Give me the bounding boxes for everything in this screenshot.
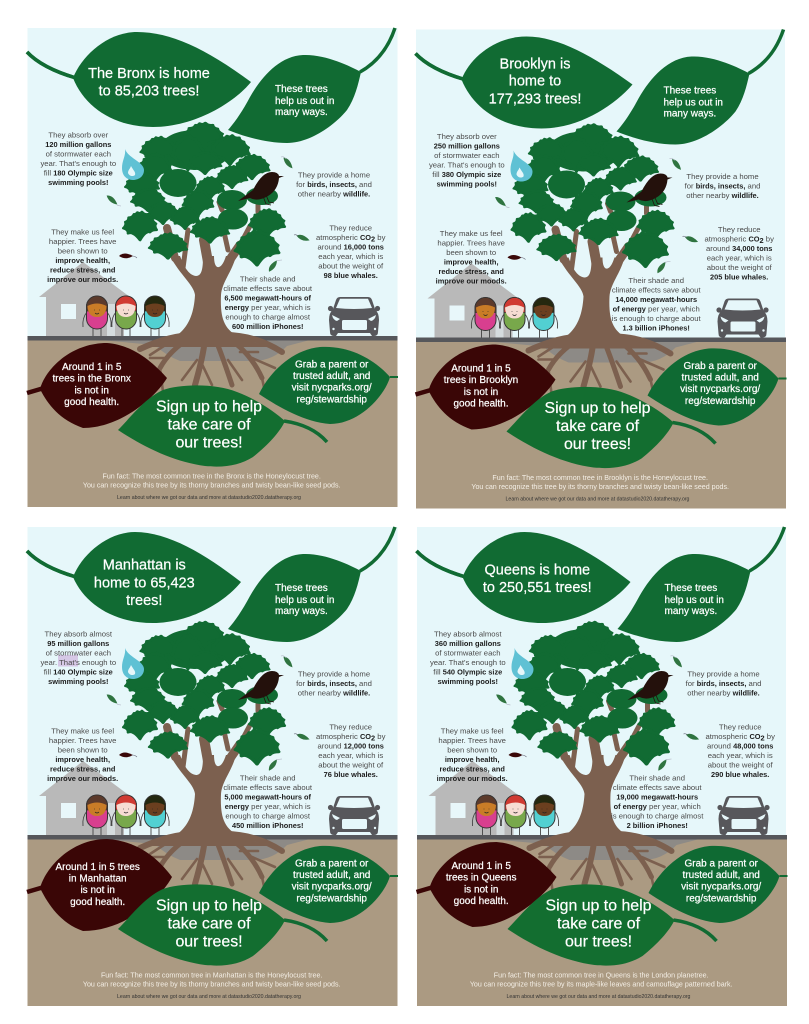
callout: grab a parent: reg/stewardship [296, 394, 367, 405]
text: stormwater: 360 million gallons [435, 639, 501, 648]
text: stormwater: of stormwater each [46, 648, 111, 658]
callout: health: is not in [80, 885, 115, 896]
text: wildlife [686, 669, 761, 698]
title: Manhattan is [103, 557, 186, 573]
text: happiness: happier. Trees have [438, 736, 506, 745]
text: stormwater: swimming pools! [437, 180, 497, 188]
text: stormwater: of stormwater each [46, 150, 111, 158]
illustration: house, tree, roots, children, car [28, 622, 398, 1006]
fun fact [83, 472, 341, 490]
callout: health: trees in Brooklyn [444, 375, 518, 386]
callout: health: good health. [453, 398, 509, 410]
callout: sign up: our trees! [564, 436, 631, 453]
text: energy: enough to charge almost [225, 812, 311, 821]
text: carbon dioxide: atmospheric CO [705, 732, 761, 741]
callout: grab a parent: visit nycparks.org/ [680, 384, 760, 395]
fun fact: Fun fact: The most common tree in Queens is the London planetree. [494, 971, 709, 979]
text: stormwater: They absorb almost [434, 629, 502, 638]
callout: sign up: take care of [556, 418, 640, 435]
text: carbon dioxide: by [765, 732, 775, 741]
text: wildlife: other nearby wildlife. [298, 190, 370, 199]
text: happiness: been shown to [58, 247, 108, 256]
callout: health: Around 1 in 5 [451, 364, 511, 374]
callout: grab a parent: Grab a parent or [295, 858, 369, 869]
fun fact [470, 971, 733, 989]
text: wildlife [296, 170, 372, 199]
callout: grab a parent: trusted adult, and [682, 372, 759, 384]
text: energy [223, 275, 313, 331]
text: stormwater: fill 380 Olympic size [432, 170, 501, 179]
callout: sign up [156, 898, 262, 950]
heading: these trees: help us out in [664, 98, 723, 108]
fun fact: You can recognize this tree by its thorny branches and twisty bean-like seed pods. [83, 482, 341, 490]
text: happiness: been shown to [446, 248, 496, 257]
illustration: house, tree, roots, children, car [416, 124, 786, 508]
fun fact: You can recognize this tree by its maple-like leaves and camouflage patterned bark. [470, 981, 733, 989]
text: energy: climate effects save about [223, 284, 313, 293]
fun fact: Fun fact: The most common tree in Manhattan is the Honeylocust tree. [101, 971, 322, 979]
text: carbon dioxide: by [764, 235, 774, 244]
text: stormwater: year. That's enough to [40, 159, 116, 168]
text: energy: climate effects save about [613, 783, 702, 792]
panel background [416, 30, 785, 508]
text: happiness: improve health, [444, 258, 499, 267]
text: happiness: happier. Trees have [49, 736, 116, 745]
panel: Queens [416, 527, 788, 1006]
text: energy [223, 774, 313, 830]
text: stormwater: fill 180 Olympic size [44, 168, 113, 178]
callout: health [446, 861, 517, 907]
source: Learn about where we got our data and more at datastudio2020.datatherapy.org [117, 495, 301, 501]
text: stormwater [40, 629, 116, 686]
panel: The Bronx [27, 28, 398, 507]
text: energy: 600 million iPhones! [232, 322, 303, 331]
callout: health: good health. [454, 896, 509, 907]
callout: health: good health. [70, 897, 125, 908]
callout: sign up: take care of [557, 916, 641, 932]
text: carbon dioxide: atmospheric CO [316, 233, 371, 242]
panel background [417, 527, 786, 1006]
text: stormwater: swimming pools! [438, 677, 498, 686]
text: stormwater: 120 million gallons [45, 140, 111, 149]
text: stormwater [40, 130, 116, 187]
callout: grab a parent [292, 359, 372, 405]
fun fact [83, 971, 341, 989]
text: energy: 450 million iPhones! [232, 821, 303, 830]
text: energy: is enough to charge about [612, 314, 702, 323]
text: carbon dioxide: atmospheric CO [704, 235, 760, 244]
callout: sign up: take care of [167, 416, 251, 434]
text: energy: Their shade and [628, 276, 684, 285]
text: carbon dioxide: each year, which is [707, 254, 772, 263]
text: happiness [47, 727, 118, 783]
illustration: house, tree, roots, children, car [28, 123, 398, 507]
heading: these trees: help us out in [664, 595, 724, 606]
text: happiness: reduce stress, and [439, 267, 504, 276]
callout: grab a parent: reg/stewardship [685, 396, 756, 407]
text: wildlife: They provide a home [298, 669, 370, 678]
illustration: house, tree, roots, children, car [417, 622, 787, 1006]
callout: grab a parent: Grab a parent or [685, 858, 759, 869]
heading: these trees: help us out in [275, 595, 334, 606]
callout: health: Around 1 in 5 [451, 861, 511, 872]
heading: these trees: These trees [275, 583, 328, 594]
text: happiness: They make us feel [51, 727, 114, 736]
highlight on word [58, 655, 78, 666]
text: happiness: improve our moods. [47, 275, 118, 284]
text: energy: climate effects save about [223, 783, 313, 792]
text: stormwater: of stormwater each [435, 648, 500, 658]
text: carbon dioxide: 205 blue whales. [710, 273, 768, 282]
title [88, 66, 210, 100]
callout: grab a parent: visit nycparks.org/ [292, 383, 372, 394]
text: energy: 19,000 megawatt-hours [616, 793, 698, 802]
callout: grab a parent: trusted adult, and [683, 870, 760, 881]
text: happiness: improve our moods. [47, 774, 118, 783]
leaf: helpers and call to action shapes [27, 28, 398, 467]
callout: sign up: our trees! [175, 933, 243, 950]
callout: health: Around 1 in 5 [62, 362, 122, 373]
text: wildlife: other nearby wildlife. [298, 689, 370, 698]
callout: health: in Manhattan [69, 874, 127, 885]
fun fact: Fun fact: The most common tree in the Bronx is the Honeylocust tree. [103, 472, 321, 480]
text: energy: enough to charge almost [225, 313, 311, 322]
text: carbon dioxide: each year, which is [318, 751, 383, 760]
leaf: helpers and call to action shapes [27, 527, 398, 966]
text: happiness: improve health, [55, 755, 110, 764]
text: happiness: reduce stress, and [440, 765, 505, 774]
text: happiness: reduce stress, and [50, 266, 116, 275]
text: carbon dioxide: They reduce [329, 224, 372, 233]
callout: grab a parent: visit nycparks.org/ [292, 882, 372, 893]
text: stormwater: 95 million gallons [47, 639, 109, 648]
text: carbon dioxide: They reduce [719, 723, 762, 732]
text: carbon dioxide: each year, which is [708, 751, 773, 760]
callout: grab a parent [680, 361, 760, 407]
heading: these trees [275, 84, 334, 118]
text: carbon dioxide: by [375, 732, 386, 741]
text: happiness: been shown to [447, 746, 497, 755]
text: carbon dioxide: around 12,000 tons [318, 742, 384, 751]
callout: grab a parent: Grab a parent or [684, 361, 758, 372]
text: energy [612, 276, 702, 333]
callout: health [444, 364, 518, 410]
text: carbon dioxide: 2 [760, 236, 764, 245]
text: wildlife: They provide a home [687, 669, 760, 678]
callout: grab a parent: visit nycparks.org/ [681, 882, 761, 893]
text: happiness: happier. Trees have [437, 239, 505, 248]
text: stormwater: They absorb over [48, 130, 109, 139]
text: happiness: They make us feel [441, 727, 504, 736]
text: energy: is enough to charge almost [611, 812, 704, 821]
text: energy: Their shade and [240, 275, 295, 284]
callout: sign up: Sign up to help [156, 399, 262, 416]
text: stormwater [430, 629, 506, 686]
text: energy: 2 billion iPhones! [627, 821, 688, 830]
text: carbon dioxide: each year, which is [318, 252, 383, 261]
text: carbon dioxide: 76 blue whales. [324, 770, 378, 779]
text: happiness [47, 228, 118, 284]
text: happiness: reduce stress, and [50, 765, 116, 774]
callout: sign up [545, 898, 652, 950]
text: wildlife: for birds, insects, and [686, 679, 761, 688]
text: stormwater: of stormwater each [434, 151, 499, 160]
callout: sign up [544, 400, 651, 453]
heading: these trees: These trees [664, 583, 717, 594]
text: wildlife: other nearby wildlife. [686, 191, 759, 200]
text: happiness: improve health, [55, 256, 110, 265]
callout: health: trees in Queens [446, 873, 517, 884]
callout: grab a parent: reg/stewardship [686, 893, 757, 904]
callout: grab a parent [292, 858, 372, 904]
callout: sign up: Sign up to help [544, 400, 651, 417]
text: carbon dioxide: by [375, 233, 386, 242]
text: stormwater: They absorb almost [45, 629, 113, 638]
text: carbon dioxide [705, 723, 775, 779]
heading: these trees: help us out in [275, 96, 334, 107]
text: carbon dioxide: about the weight of [708, 761, 774, 770]
text: happiness: improve health, [445, 755, 500, 764]
heading: these trees: These trees [275, 84, 328, 95]
callout: sign up [156, 399, 262, 451]
text: carbon dioxide: 2 [371, 734, 375, 743]
callout: health [55, 862, 140, 908]
title: Queens is home [485, 562, 590, 578]
callout: sign up: Sign up to help [545, 898, 652, 915]
heading: these trees [664, 86, 723, 120]
text: happiness [436, 229, 507, 286]
text: stormwater: year. That's enough to [40, 658, 116, 667]
panel background [28, 527, 398, 1006]
text: carbon dioxide: around 16,000 tons [318, 243, 384, 252]
panel background [28, 28, 398, 506]
callout: health [53, 362, 131, 408]
heading: these trees: many ways. [664, 108, 716, 120]
leaf: helpers and call to action shapes [416, 527, 788, 966]
title: 177,293 trees! [489, 91, 581, 107]
text: energy: Their shade and [240, 774, 295, 783]
title: home to 65,423 [94, 575, 195, 591]
text: energy: of energy per year, which [613, 305, 700, 314]
text: stormwater: They absorb over [437, 132, 497, 141]
text: carbon dioxide: 2 [371, 235, 375, 244]
text: wildlife: for birds, insects, and [296, 679, 372, 688]
text: happiness: been shown to [58, 746, 108, 755]
title: Brooklyn is [500, 56, 570, 72]
text: carbon dioxide: about the weight of [318, 262, 384, 271]
text: carbon dioxide: 98 blue whales. [324, 271, 378, 280]
callout: sign up: our trees! [175, 434, 243, 451]
text: happiness: improve our moods. [436, 277, 507, 286]
text: stormwater: swimming pools! [48, 178, 108, 187]
callout: sign up: take care of [167, 916, 251, 932]
callout: grab a parent: Grab a parent or [295, 359, 369, 370]
text: energy: 1.3 billion iPhones! [623, 324, 690, 333]
title [483, 562, 592, 596]
text: energy [611, 774, 704, 830]
leaf: helpers and call to action shapes [416, 30, 786, 468]
fun fact: You can recognize this tree by its thorny branches and twisty bean-like seed pods. [83, 981, 341, 989]
text: happiness [437, 727, 508, 783]
callout: health: trees in the Bronx [53, 374, 131, 385]
heading: these trees [664, 583, 724, 617]
text: energy: climate effects save about [612, 286, 701, 295]
text: wildlife: They provide a home [298, 170, 370, 179]
title: The Bronx is home [88, 66, 210, 82]
text: energy: 14,000 megawatt-hours [615, 295, 697, 304]
text: energy: of energy per year, which [614, 802, 701, 811]
callout: health: is not in [464, 387, 498, 398]
text: stormwater: swimming pools! [48, 677, 108, 686]
fun fact [471, 474, 729, 491]
title: home to [509, 74, 561, 90]
heading: these trees: many ways. [664, 606, 717, 617]
title [489, 56, 581, 107]
text: happiness: improve our moods. [437, 774, 508, 783]
heading: these trees [275, 583, 334, 617]
callout: grab a parent: reg/stewardship [296, 893, 367, 904]
text: wildlife: for birds, insects, and [685, 182, 760, 190]
text: carbon dioxide [316, 224, 386, 280]
source: Learn about where we got our data and more at datastudio2020.datatherapy.org [507, 994, 691, 1000]
text: carbon dioxide: They reduce [718, 225, 761, 234]
text: wildlife: other nearby wildlife. [687, 689, 760, 698]
text: energy: energy per year, which is [225, 303, 311, 312]
text: stormwater: year. That's enough to [430, 658, 506, 667]
text: carbon dioxide: around 48,000 tons [707, 742, 773, 751]
text: carbon dioxide: around 34,000 tons [706, 244, 772, 253]
text: energy: 5,000 megawatt-hours of [224, 793, 312, 802]
text: carbon dioxide: 2 [761, 734, 765, 743]
text: stormwater: year. That's enough to [429, 160, 505, 170]
callout: sign up: our trees! [565, 933, 632, 950]
fun fact: You can recognize this tree by its thorny branches and twisty bean-like seed pods. [471, 483, 729, 491]
callout: sign up: Sign up to help [156, 898, 262, 915]
text: carbon dioxide: about the weight of [707, 263, 773, 272]
callout: health: good health. [64, 397, 119, 408]
text: happiness: They make us feel [440, 229, 503, 238]
callout: health: is not in [464, 884, 498, 895]
title: to 85,203 trees! [99, 84, 199, 100]
text: carbon dioxide: 290 blue whales. [711, 770, 769, 779]
panel: Brooklyn [416, 30, 786, 508]
text: carbon dioxide: about the weight of [318, 761, 384, 770]
text: stormwater: 250 million gallons [434, 142, 500, 150]
text: carbon dioxide [316, 723, 386, 779]
text: carbon dioxide: They reduce [329, 723, 372, 732]
text: wildlife [296, 669, 372, 698]
text: energy: Their shade and [629, 774, 685, 783]
callout: grab a parent: trusted adult, and [293, 870, 370, 881]
text: stormwater [429, 132, 505, 188]
title: to 250,551 trees! [483, 580, 592, 596]
title: trees! [126, 593, 162, 609]
text: stormwater: fill 540 Olympic size [433, 668, 502, 676]
text: stormwater: fill 140 Olympic size [44, 668, 113, 676]
heading: these trees: many ways. [275, 606, 328, 617]
text: happiness: They make us feel [51, 228, 114, 237]
source: Learn about where we got our data and more at datastudio2020.datatherapy.org [117, 994, 301, 1000]
callout: health: Around 1 in 5 trees [55, 862, 140, 873]
text: carbon dioxide [704, 225, 774, 282]
heading: these trees: These trees [664, 86, 716, 96]
text: carbon dioxide: atmospheric CO [316, 732, 371, 741]
callout: grab a parent [681, 858, 761, 904]
text: wildlife: for birds, insects, and [296, 180, 372, 189]
title [94, 557, 195, 609]
source: Learn about where we got our data and more at datastudio2020.datatherapy.org [506, 496, 690, 502]
text: wildlife [685, 172, 760, 200]
callout: health: is not in [74, 385, 109, 396]
text: energy: energy per year, which is [225, 802, 311, 811]
text: wildlife: They provide a home [686, 172, 759, 181]
text: energy: 6,500 megawatt-hours of [224, 294, 312, 303]
panel: Manhattan [27, 527, 398, 1006]
heading: these trees: many ways. [275, 107, 328, 118]
callout: grab a parent: trusted adult, and [293, 371, 370, 382]
fun fact: Fun fact: The most common tree in Brooklyn is the Honeylocust tree. [492, 474, 708, 482]
text: happiness: happier. Trees have [49, 237, 116, 246]
